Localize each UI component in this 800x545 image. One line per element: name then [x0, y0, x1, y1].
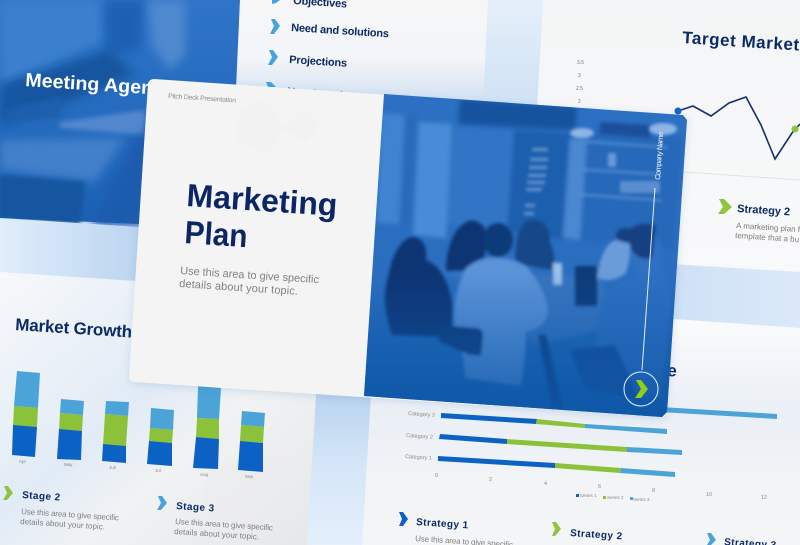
- list item: new targets: [266, 82, 349, 102]
- chart month labels: Jun: [109, 465, 117, 470]
- horizontal stacked bar chart: [405, 407, 777, 502]
- heading: stage 3: Stage 3: [176, 501, 215, 514]
- chart axis numbers: 4: [544, 481, 547, 487]
- chart month labels: Sep: [245, 474, 254, 479]
- heading: market growth: Market Growth: [15, 315, 133, 342]
- list item: need and solutions: Need and solutions: [291, 22, 389, 40]
- heading fragment: e: [667, 361, 677, 381]
- heading: marketing plan: [184, 177, 339, 254]
- line chart: [674, 97, 800, 159]
- chart axis numbers: 8: [652, 488, 655, 494]
- line and company name: Company Name: [653, 132, 665, 180]
- icon: circle arrow: [624, 372, 658, 406]
- chart month labels: May: [64, 462, 73, 467]
- list item: new targets: New targets: [287, 86, 349, 102]
- chart axis labels: 3: [578, 73, 581, 79]
- chart legend: Series 2: [607, 495, 624, 500]
- chart legend: [576, 493, 650, 502]
- heading: strategy 2: Strategy 2: [737, 203, 790, 218]
- chart month labels: Apr: [19, 459, 27, 464]
- text: subtitle: Use this area to give specific: [180, 265, 320, 286]
- icon: blue chevron: [157, 496, 167, 510]
- text: subtitle: [179, 265, 320, 298]
- chart axis labels: 3.5: [577, 60, 584, 66]
- photo lamps: [570, 123, 677, 138]
- icon: blue chevron: [707, 533, 716, 545]
- photo background: windows and wall: [376, 99, 683, 250]
- chart axis labels: 2: [578, 99, 581, 105]
- panel: main title card: [129, 79, 690, 420]
- icon: green chevron: [3, 486, 13, 500]
- text: stage 2 description: [20, 507, 119, 531]
- line and company name: [642, 132, 665, 370]
- heading: strategy 2 lower: Strategy 2: [570, 528, 623, 542]
- chart month labels: Jul: [155, 468, 161, 473]
- panel: target market: [537, 0, 800, 272]
- chart axis numbers: 2: [489, 477, 492, 483]
- heading: stage 2: Stage 2: [22, 490, 61, 503]
- chart category labels: Category 3: [408, 411, 435, 419]
- heading: marketing plan: Plan: [184, 214, 249, 254]
- photo table and floor: [450, 272, 605, 344]
- text: subtitle: details about your topic.: [179, 278, 298, 298]
- heading: strategy 1: Strategy 1: [416, 517, 469, 531]
- bottom fade overlay: [364, 282, 675, 417]
- panel: agenda list: [236, 0, 488, 106]
- photo bottles and jars: [600, 122, 660, 193]
- text: strategy description: template that a bu: [735, 231, 799, 244]
- chart category labels: [405, 411, 435, 462]
- panel: strategy bars: [362, 319, 800, 545]
- chart month labels: Aug: [200, 472, 209, 477]
- text: stage 3 description: details about your topic.: [174, 527, 259, 541]
- chart month labels: [19, 459, 254, 479]
- stacked bar chart: [12, 371, 265, 479]
- panel: market growth: [0, 272, 316, 545]
- chart axis numbers: 6: [598, 484, 601, 490]
- panel: card photo: [360, 90, 690, 420]
- chart axis numbers: 12: [761, 495, 767, 501]
- heading: meeting agenda: Meeting Agen: [25, 70, 154, 99]
- heading: marketing plan: Marketing: [186, 177, 339, 223]
- text: stage 3 description: [174, 517, 273, 541]
- text: strategy description: A marketing plan f: [736, 221, 800, 234]
- text: stage 2 description: Use this area to give specific: [21, 507, 119, 522]
- chart axis numbers: 10: [706, 492, 712, 498]
- text: stage 2 description: details about your topic.: [20, 517, 105, 531]
- icon: green chevron: [552, 522, 561, 536]
- text: pitch deck label: Pitch Deck Presentation: [168, 93, 236, 105]
- photo shelves: [580, 140, 668, 202]
- panel: meeting agenda photo: [0, 0, 240, 228]
- chart axis numbers: [435, 473, 767, 501]
- icon: green chevron: [718, 199, 732, 214]
- list item: projections: [268, 50, 347, 70]
- chart legend: Series 3: [633, 497, 650, 502]
- heading: target market: Target Market: [682, 28, 800, 55]
- list item: projections: Projections: [289, 54, 347, 70]
- chart legend: Series 1: [580, 493, 597, 498]
- text: stage 3 description: Use this area to give specific: [175, 517, 273, 532]
- chart axis numbers: 0: [435, 473, 438, 479]
- chart axis labels: [576, 60, 584, 105]
- chart axis labels: 2.5: [576, 86, 583, 92]
- chart category labels: Category 2: [406, 433, 433, 441]
- icon: dark blue chevron: [399, 512, 408, 526]
- photo people: [385, 220, 670, 408]
- text: strategy description: [735, 221, 800, 244]
- chart category labels: Category 1: [405, 454, 432, 462]
- card background pattern: [235, 100, 320, 155]
